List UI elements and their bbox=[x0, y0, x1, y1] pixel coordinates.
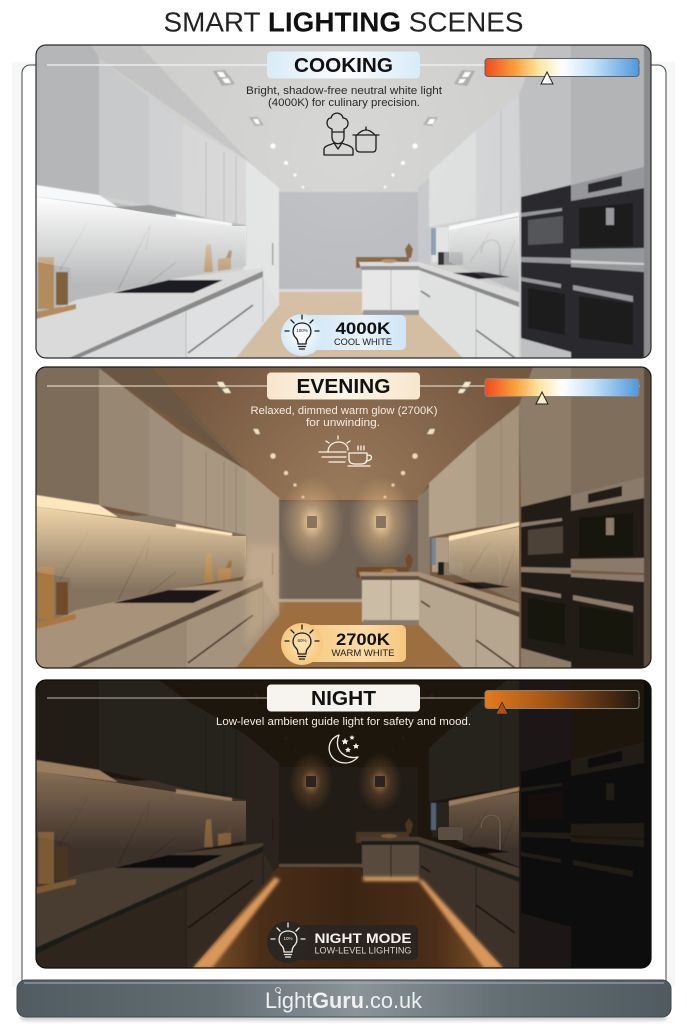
panel: night bbox=[35, 679, 652, 969]
heading: night bbox=[267, 684, 420, 712]
description bbox=[250, 405, 438, 429]
colour temperature bar bbox=[485, 378, 639, 404]
description: Relaxed, dimmed warm glow (2700K) bbox=[250, 405, 438, 417]
badge: 4000K cool white: 4000K bbox=[336, 320, 391, 338]
heading: cooking bbox=[267, 52, 420, 78]
colour temperature bar bbox=[485, 58, 639, 84]
badge: night mode: LOW-LEVEL LIGHTING bbox=[314, 946, 412, 956]
badge: 2700K warm white: 60% bbox=[297, 638, 307, 643]
badge: 2700K warm white: WARM WHITE bbox=[332, 648, 394, 658]
badge: night mode: 10% bbox=[283, 936, 293, 941]
footer logo text: LightGuru.co.uk bbox=[265, 988, 423, 1013]
badge: 4000K cool white: 100% bbox=[296, 328, 308, 333]
badge: night mode bbox=[267, 921, 418, 963]
description: Bright, shadow-free neutral white light bbox=[246, 85, 442, 97]
title: SMART LIGHTING SCENES bbox=[164, 6, 524, 38]
cooking kitchen photo bbox=[36, 46, 650, 358]
badge: 4000K cool white bbox=[281, 314, 406, 356]
description: (4000K) for culinary precision. bbox=[268, 97, 420, 109]
panel: evening bbox=[35, 366, 652, 669]
heading: evening: EVENING bbox=[296, 376, 390, 398]
badge: 2700K warm white: 2700K bbox=[336, 631, 390, 649]
badge: 4000K cool white: COOL WHITE bbox=[334, 337, 392, 347]
panel: cooking bbox=[35, 44, 652, 359]
evening kitchen photo bbox=[36, 368, 650, 668]
footer band bbox=[17, 980, 671, 1021]
heading: night: NIGHT bbox=[311, 688, 376, 710]
badge: 2700K warm white bbox=[281, 623, 406, 665]
description: for unwinding. bbox=[306, 417, 380, 429]
heading: evening bbox=[267, 372, 420, 400]
colour temperature bar bbox=[485, 690, 639, 714]
badge: night mode: NIGHT MODE bbox=[314, 930, 412, 946]
icon: sunset and cup bbox=[319, 436, 372, 466]
icon: moon and stars bbox=[329, 735, 359, 763]
description bbox=[246, 85, 442, 109]
icon: chef and pot bbox=[324, 113, 379, 155]
night kitchen photo bbox=[36, 680, 650, 968]
heading: cooking: COOKING bbox=[294, 55, 393, 77]
floor with LED glow bbox=[193, 868, 503, 968]
description: Low-level ambient guide light for safety and mood. bbox=[216, 716, 471, 728]
